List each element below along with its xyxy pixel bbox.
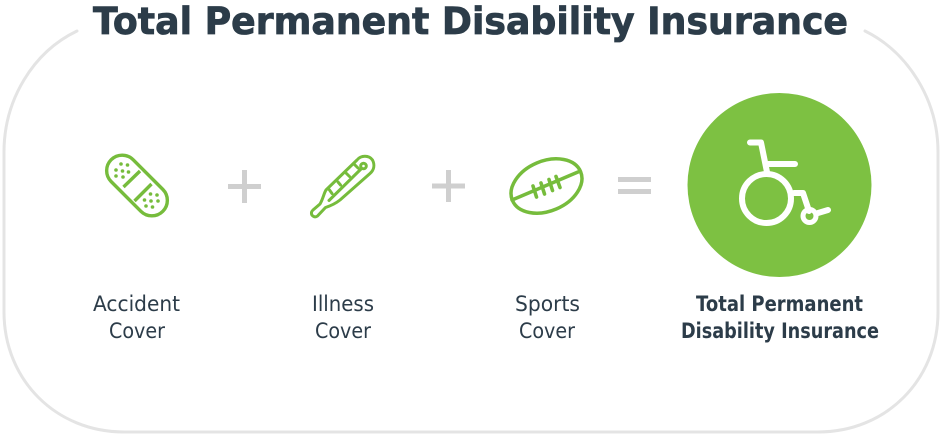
green circle with wheelchair icon <box>688 93 872 277</box>
label: total permanent disability insurance <box>681 292 879 343</box>
equals sign <box>618 180 651 192</box>
title: Total Permanent Disability Insurance <box>93 0 848 43</box>
icon: bandage <box>100 149 174 222</box>
plus sign <box>432 170 465 202</box>
label: illness cover: Illness <box>312 292 374 316</box>
label: illness cover: Cover <box>315 319 371 343</box>
label: sports cover: Sports <box>515 292 580 316</box>
label: accident cover <box>93 292 180 343</box>
label: illness cover <box>312 292 374 343</box>
icon: wheelchair <box>742 142 828 223</box>
label: total permanent disability insurance: Total Permanent <box>696 292 863 316</box>
label: sports cover <box>515 292 580 343</box>
label: accident cover: Cover <box>109 319 165 343</box>
icon: thermometer <box>311 156 374 217</box>
icon: rugby ball <box>503 149 590 223</box>
label: total permanent disability insurance: Disability Insurance <box>681 319 879 343</box>
label: accident cover: Accident <box>93 292 180 316</box>
plus sign <box>228 170 261 203</box>
label: sports cover: Cover <box>519 319 575 343</box>
